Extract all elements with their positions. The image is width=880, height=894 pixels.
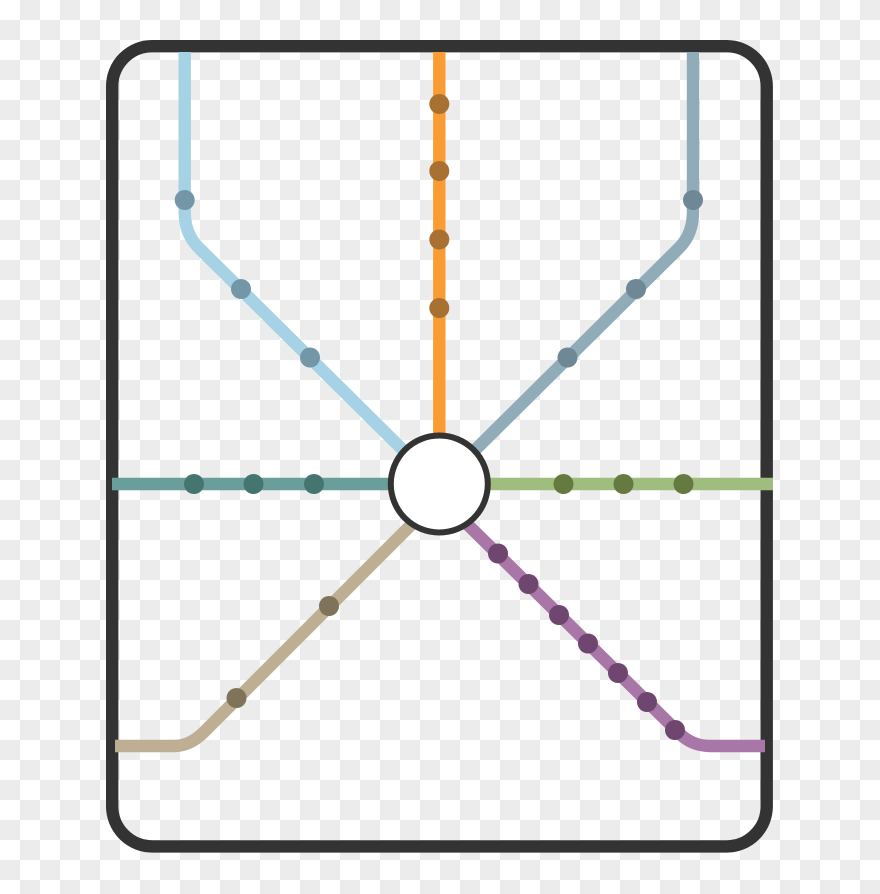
line: teal, left	[112, 474, 395, 494]
line: slate, top right	[470, 52, 703, 455]
rounded frame	[112, 46, 767, 846]
line: orange, top centre	[429, 52, 449, 440]
line: tan, bottom left	[115, 521, 415, 746]
central hub	[391, 436, 488, 532]
line: green, right	[485, 474, 773, 494]
line: light blue, top left	[175, 52, 408, 455]
line: purple, bottom right	[463, 520, 765, 746]
